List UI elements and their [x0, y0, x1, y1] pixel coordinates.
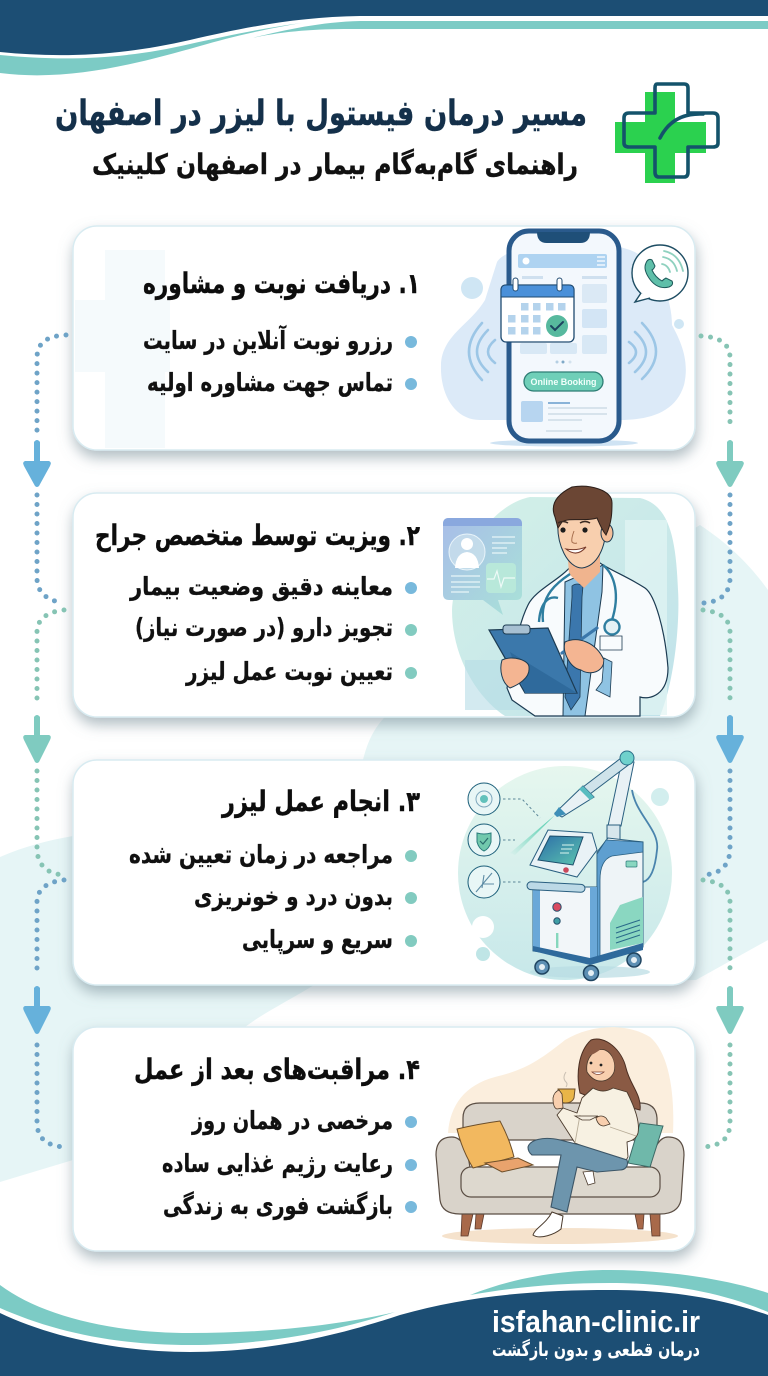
background blob: pale teal [0, 525, 768, 1182]
bullet list: معاینه دقیق وضعیت بیمار [128, 572, 393, 602]
subtitle: راهنمای گام‌به‌گام بیمار در اصفهان کلینیک [92, 148, 578, 181]
bullet list: بازگشت فوری به زندگی [163, 1191, 393, 1221]
arrow [23, 986, 51, 1034]
left connector step 1 to 2 [23, 335, 66, 603]
panel: step 3 laser procedure [73, 751, 695, 985]
illustration: woman relaxing on sofa [436, 1027, 684, 1244]
bullet list: مرخصی در همان روز [190, 1106, 393, 1136]
panel: step 4 post-op care [73, 1027, 695, 1251]
illustration: phone with booking calendar: Online Booking [530, 377, 597, 388]
footer tagline: درمان قطعی و بدون بازگشت [492, 1338, 700, 1361]
bullet list: رعایت رژیم غذایی ساده [162, 1149, 393, 1178]
arrow [23, 440, 51, 487]
doctor figure [489, 486, 668, 716]
step heading: ۲. ویزیت توسط متخصص جراح [95, 519, 420, 552]
left connector step 2 to 3 [23, 610, 64, 875]
right connector step 2 to 3 [703, 610, 744, 875]
bullet list: تعیین نوبت عمل لیزر [184, 657, 393, 687]
feature icons [468, 783, 540, 898]
footer website: isfahan-clinic.ir [492, 1304, 700, 1339]
icon: medical cross logo [615, 84, 718, 183]
card background [73, 760, 695, 985]
info panel [443, 518, 522, 615]
illustration: phone with booking calendar [441, 231, 688, 446]
top wave header [0, 0, 768, 75]
left connector step 3 to 4 [23, 880, 65, 1147]
step heading: ۳. انجام عمل لیزر [220, 785, 420, 818]
right connector step 3 to 4 [702, 880, 744, 1147]
card background [73, 493, 695, 717]
right connector step 1 to 2 [701, 336, 744, 603]
arrow [23, 715, 51, 763]
step heading: ۱. دریافت نوبت و مشاوره [143, 267, 420, 300]
panel: step 1 online booking [73, 226, 695, 450]
bullet list: بدون درد و خونریزی [194, 882, 393, 912]
title: مسیر درمان فیستول با لیزر در اصفهان [55, 94, 587, 134]
bottom wave footer [0, 1270, 768, 1376]
illustration: laser machine [458, 751, 672, 980]
bullet list [143, 325, 417, 398]
decorative watermark cross [75, 250, 170, 448]
arrow [716, 440, 744, 487]
bullet list: تجویز دارو (در صورت نیاز) [135, 613, 393, 643]
step heading: ۴. مراقبت‌های بعد از عمل [134, 1053, 420, 1086]
arrow [716, 986, 744, 1034]
bullet list [129, 840, 417, 955]
card background [73, 1027, 695, 1251]
arrow [716, 715, 744, 763]
bullet list [162, 1106, 417, 1221]
bullet list: رزرو نوبت آنلاین در سایت [143, 325, 393, 356]
bullet list [128, 572, 417, 687]
bullet list: تماس جهت مشاوره اولیه [147, 368, 393, 398]
card background [73, 226, 695, 450]
illustration: doctor with clipboard [443, 486, 678, 716]
bullet list: مراجعه در زمان تعیین شده [129, 840, 393, 870]
panel: step 2 surgeon visit [73, 486, 695, 717]
bullet list: سریع و سرپایی [242, 925, 393, 955]
